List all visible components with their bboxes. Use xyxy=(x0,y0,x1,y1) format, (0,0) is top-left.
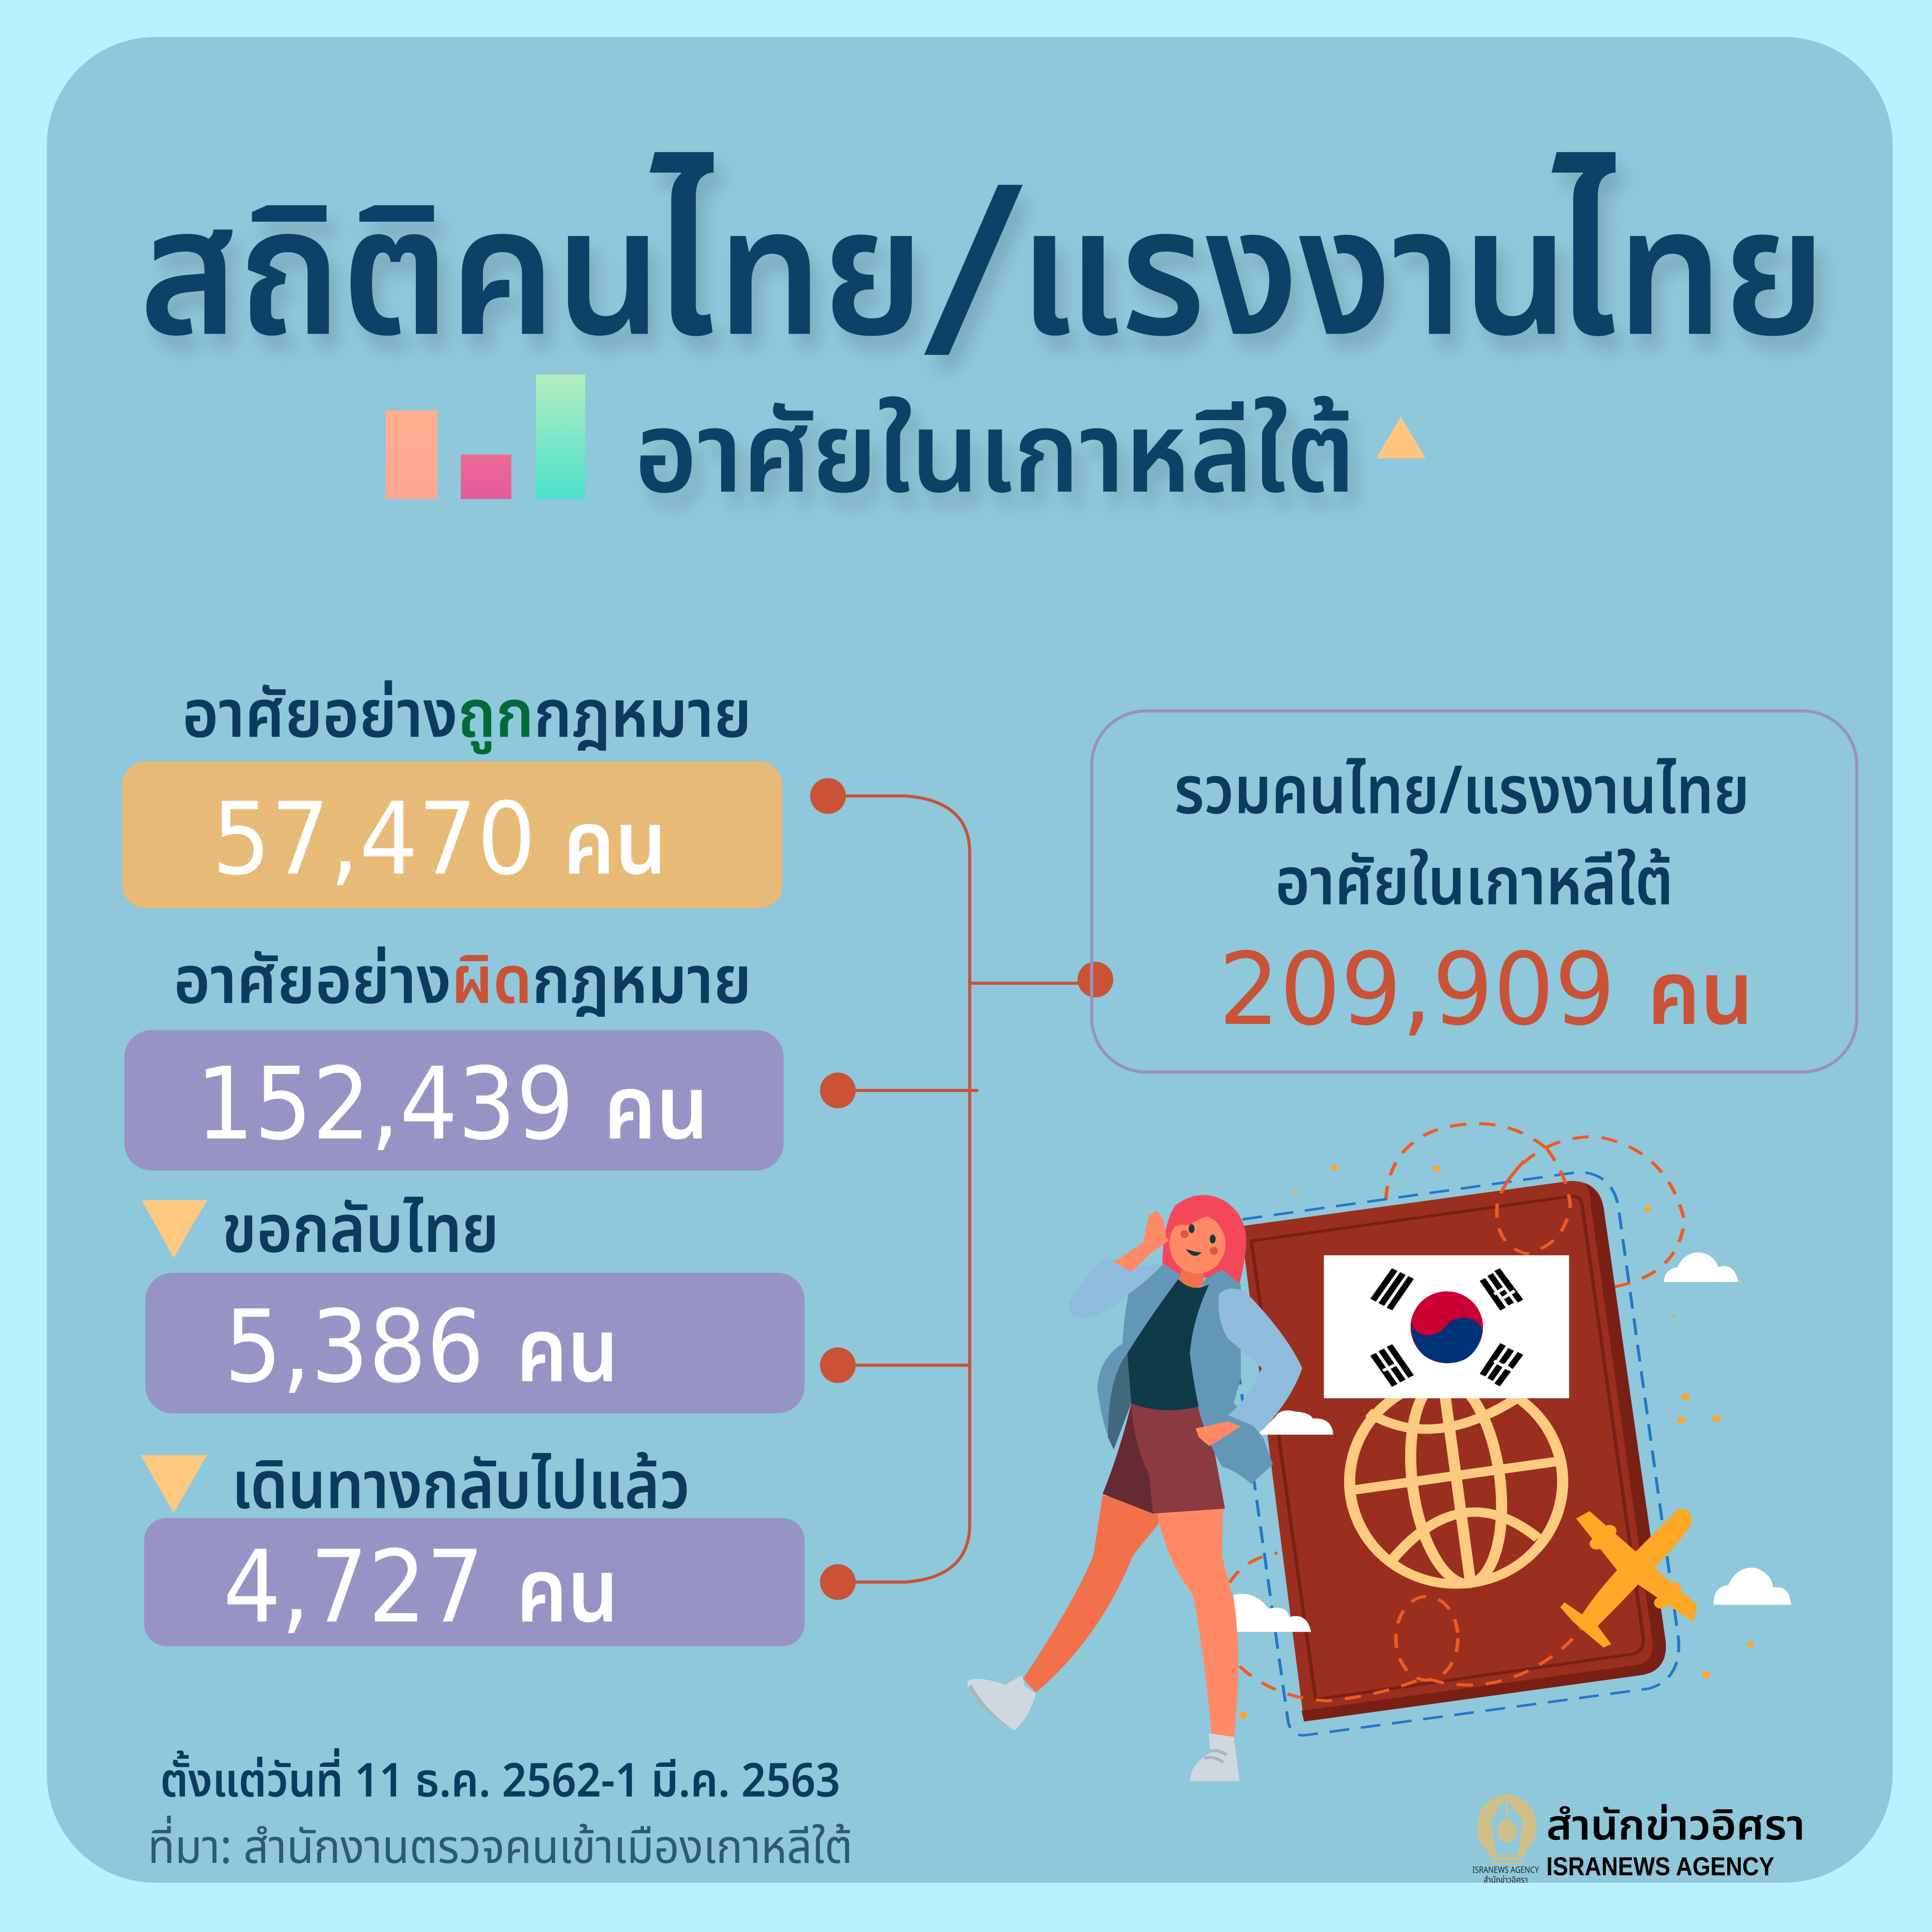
shorts shadow xyxy=(1103,1404,1153,1514)
icon: down triangle xyxy=(142,1200,207,1258)
already returned block xyxy=(141,1437,805,1662)
dashed flight paths over passport xyxy=(1239,1149,1582,1701)
title: ทย xyxy=(1617,145,1826,414)
passport cover xyxy=(1241,1181,1666,1721)
label: legal: อาศัยอย่างถูกกฎหมาย xyxy=(183,667,752,767)
number: already returned: 4,727 xyxy=(223,1529,484,1645)
hand on hip xyxy=(1196,1421,1241,1446)
title: แรงงาน xyxy=(1019,145,1568,414)
flag of South Korea xyxy=(1324,1255,1569,1398)
total number xyxy=(1219,930,1753,1064)
airplane xyxy=(1560,1508,1697,1648)
number: already returned xyxy=(223,1527,619,1662)
total number: 209,909 xyxy=(1219,931,1615,1048)
woman traveller xyxy=(967,1195,1302,1781)
title: ไ xyxy=(648,101,715,433)
total heading line 1: รวมคนไทย/แรงงานไทย xyxy=(1174,743,1749,843)
illegal residents block xyxy=(125,933,783,1179)
icon: up triangle xyxy=(1376,416,1426,458)
footer date: ตั้งแต่วันที่ 11 ธ.ค. 2562-1 มี.ค. 2563 xyxy=(160,1747,840,1818)
passport edge xyxy=(1302,1183,1666,1721)
dashed flight paths behind passport xyxy=(1230,1123,1684,1583)
box: requested return xyxy=(145,1273,805,1413)
total heading line 2: อาศัยในเกาหลีใต้ xyxy=(1275,834,1673,934)
subtitle: อาศัยในเกาหลีใต้ xyxy=(635,371,1355,543)
back leg xyxy=(1023,1495,1159,1692)
title xyxy=(139,101,1826,433)
shorts xyxy=(1103,1404,1225,1514)
illustration: passport and traveller xyxy=(967,1123,1791,1781)
logo: Isranews Agency xyxy=(1472,1794,1805,1887)
number: requested return xyxy=(224,1287,619,1421)
globe emblem xyxy=(1350,1376,1563,1587)
legal residents block xyxy=(122,667,782,914)
number: already returned: คน xyxy=(516,1527,619,1662)
label: illegal: อาศัยอย่างผิดกฎหมาย xyxy=(174,933,752,1033)
hair back xyxy=(1163,1195,1246,1371)
title: ไ xyxy=(1549,101,1617,433)
face xyxy=(1169,1214,1225,1274)
title: ทย xyxy=(717,145,924,414)
raised sleeve xyxy=(1068,1256,1164,1318)
logo small english: ISRANEWS AGENCY xyxy=(1472,1864,1539,1877)
raised hand xyxy=(1114,1210,1169,1272)
front leg xyxy=(1156,1508,1238,1739)
connector dots xyxy=(810,778,1113,1600)
title: สถิติคน xyxy=(139,145,662,414)
number: illegal: 152,439 xyxy=(196,1046,574,1162)
box: legal xyxy=(122,762,782,908)
number: legal: 57,470 xyxy=(212,781,536,897)
confetti dots xyxy=(1239,1165,1754,1719)
eyes and mouth xyxy=(1180,1224,1218,1256)
number: legal xyxy=(212,780,667,914)
number: legal: คน xyxy=(563,780,667,914)
logo small thai: สำนักข่าวอิศรา xyxy=(1483,1874,1528,1887)
jacket right panel xyxy=(1190,1270,1273,1484)
logo emblem xyxy=(1477,1794,1536,1864)
logo thai name: สำนักข่าวอิศรา xyxy=(1547,1796,1805,1859)
jacket left panel xyxy=(1097,1264,1181,1449)
right sleeve xyxy=(1219,1289,1302,1430)
number: requested return: 5,386 xyxy=(224,1289,484,1405)
dashed passport outline xyxy=(1236,1172,1679,1735)
footer source: ที่มา: สำนักงานตรวจคนเข้าเมืองเกาหลีใต้ xyxy=(148,1813,852,1884)
hair fringe xyxy=(1168,1203,1228,1230)
passport inner line xyxy=(1251,1196,1644,1699)
box: already returned xyxy=(144,1518,805,1646)
clouds xyxy=(1234,1252,1791,1632)
total number: คน xyxy=(1648,930,1753,1064)
back shoe xyxy=(967,1675,1036,1731)
number: illegal: คน xyxy=(604,1044,709,1179)
label: already returned: เดินทางกลับไปแล้ว xyxy=(232,1437,690,1538)
shirt xyxy=(1127,1276,1209,1410)
icon: down triangle xyxy=(141,1455,207,1513)
label: requested return: ขอกลับไทย xyxy=(222,1181,499,1282)
logo english name: ISRANEWS AGENCY xyxy=(1547,1853,1774,1881)
box: illegal xyxy=(125,1030,783,1170)
bar chart icon xyxy=(385,375,585,499)
front shoe xyxy=(1191,1733,1239,1781)
neck xyxy=(1178,1264,1203,1289)
connector lines xyxy=(845,796,1080,1582)
number: requested return: คน xyxy=(516,1287,619,1421)
panel: total xyxy=(1092,711,1857,1072)
requested return block xyxy=(142,1181,805,1421)
number: illegal xyxy=(196,1044,709,1179)
jacket lining xyxy=(1108,1353,1131,1449)
